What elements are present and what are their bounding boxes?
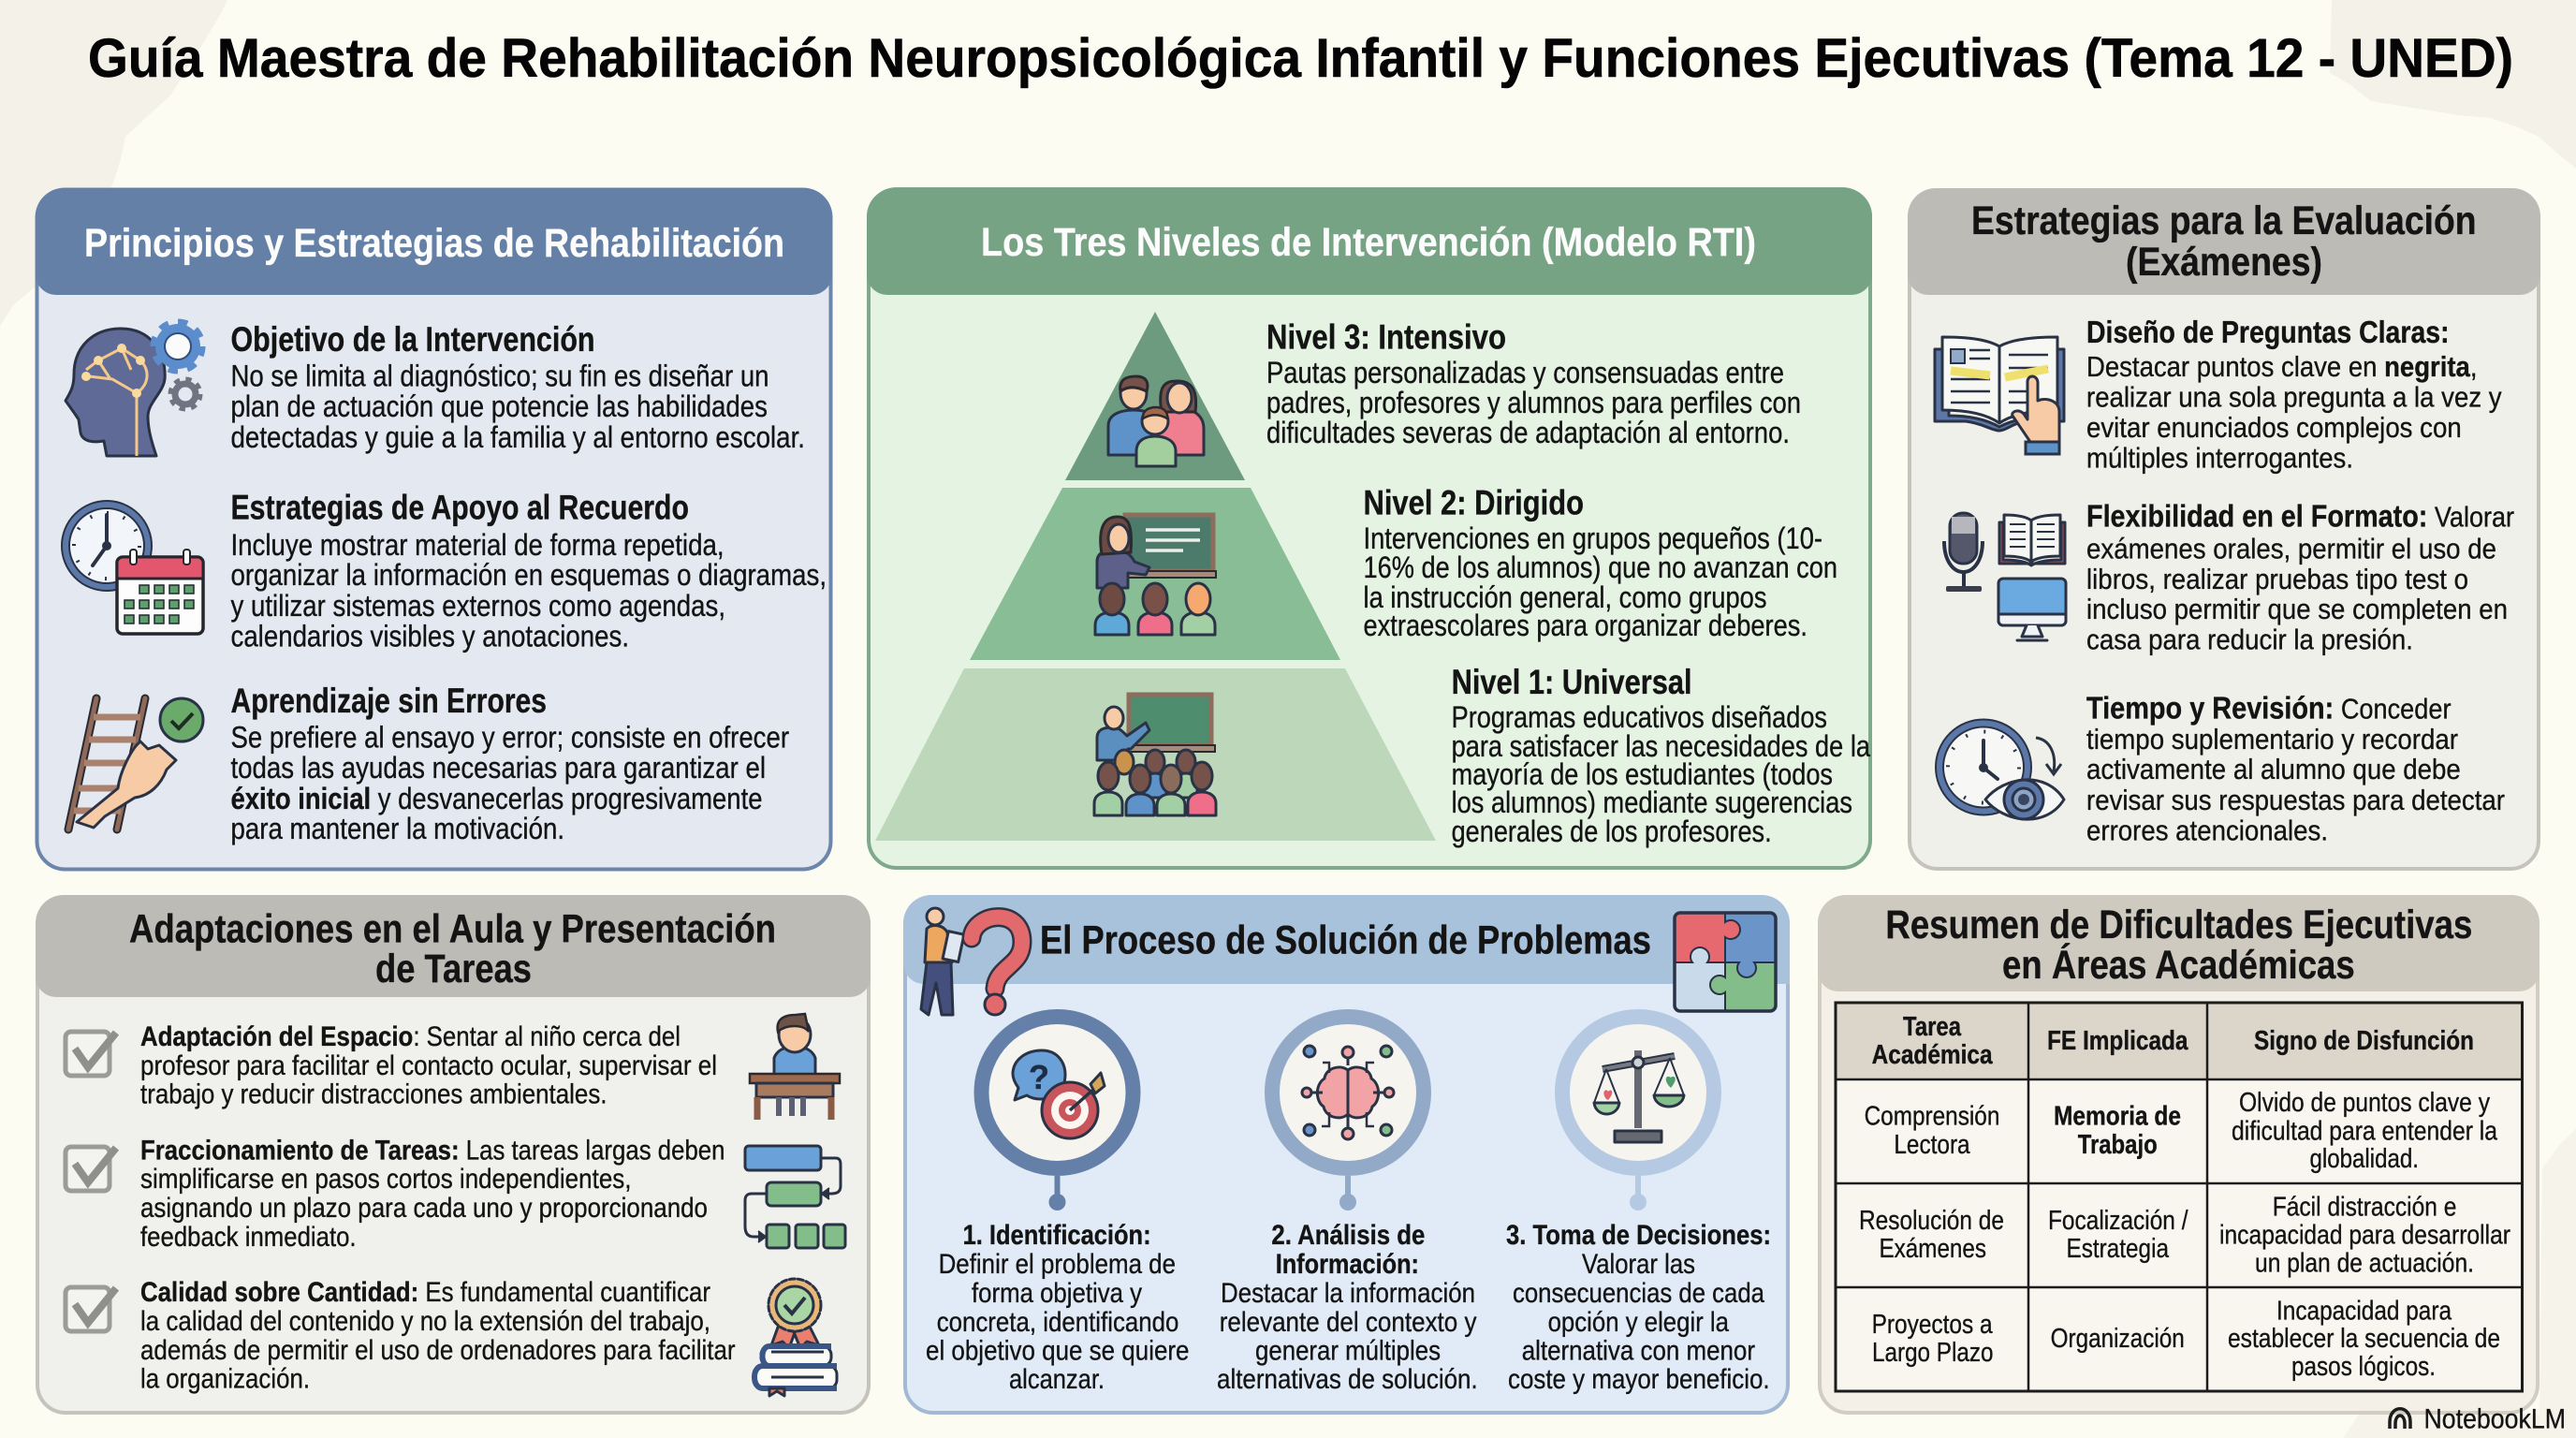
text: nivel 1 [1452,663,1870,848]
icon: head with gears [66,322,202,456]
table: dificultades ejecutivas: Signo de Disfunción [2254,1026,2474,1056]
panel: los tres niveles de intervención [867,188,1872,868]
text: nivel 1: Nivel 1: Universal [1452,663,1692,701]
text: flexibilidad en el formato: incluso permitir que se completen en [2086,593,2508,625]
table: dificultades ejecutivas: incapacidad para desarrollar [2219,1221,2510,1251]
text: objetivo de la intervención: plan de actuación que potencie las habilidades [230,389,768,423]
text: tiempo y revisión: tiempo suplementario y recordar [2086,723,2458,756]
text: tiempo y revisión: revisar sus respuestas para detectar [2086,784,2505,816]
text: análisis de información: generar múltiples [1255,1335,1441,1367]
text: adaptación del espacio: Adaptación del Espacio: Sentar al niño cerca del [140,1021,681,1052]
heading: adaptaciones: Adaptaciones en el Aula y Presentación [129,906,776,951]
checkbox 3 [66,1287,116,1331]
text: estrategias de apoyo al recuerdo: organizar la información en esquemas o diagramas, [230,558,827,592]
panel: principios y estrategias de rehabilitación [36,188,832,869]
table: dificultades ejecutivas: Olvido de puntos clave y [2239,1088,2490,1118]
heading: adaptaciones [36,895,871,997]
heading: principios [36,188,832,295]
heading: modelo RTI [867,188,1872,295]
text: nivel 1: los alumnos) mediante sugerencias [1452,785,1852,819]
text: nivel 1: para satisfacer las necesidades de la [1452,729,1870,763]
text: análisis de información: relevante del contexto y [1220,1307,1477,1338]
text: flexibilidad en el formato: casa para reducir la presión. [2086,624,2413,656]
text: aprendizaje sin errores [230,682,789,845]
text: estrategias de apoyo al recuerdo: Estrategias de Apoyo al Recuerdo [230,489,689,526]
heading: evaluación [1908,188,2540,295]
icon: task breakdown flow [745,1146,845,1248]
text: toma de decisiones: consecuencias de cada [1513,1278,1764,1309]
table: dificultades ejecutivas: Incapacidad para [2276,1297,2452,1327]
text: estrategias de apoyo al recuerdo: Incluye mostrar material de forma repetida, [230,528,724,562]
table: dificultades ejecutivas: pasos lógicos. [2291,1352,2436,1382]
icon: family [1108,376,1204,466]
panel: el proceso de solución de problemas [903,895,1790,1413]
text: tiempo y revisión: errores atencionales. [2086,814,2328,846]
text: flexibilidad en el formato: Flexibilidad en el Formato: Valorar [2086,498,2514,533]
table: dificultades ejecutivas: Organización [2051,1324,2185,1354]
text: calidad sobre cantidad: Calidad sobre Cantidad: Es fundamental cuantificar [140,1277,710,1308]
table: dificultades ejecutivas: Largo Plazo [1872,1338,1994,1368]
text: nivel 3: dificultades severas de adaptación al entorno. [1266,416,1790,449]
table: dificultades ejecutivas: Proyectos a [1872,1310,1993,1340]
text: calidad sobre cantidad: la calidad del contenido y no la extensión del trabajo, [140,1306,710,1337]
text: aprendizaje sin errores: para mantener la motivación. [230,812,564,845]
heading: resumen: en Áreas Académicas [2002,943,2355,988]
table: dificultades ejecutivas: Fácil distracción e [2273,1193,2456,1223]
step 3 marker and icon [1562,1017,1714,1211]
text: identificación [926,1220,1189,1395]
icon: clock and eye [1939,723,2064,819]
text: adaptación del espacio: profesor para facilitar el contacto ocular, supervisar el [140,1050,717,1081]
text: nivel 2: 16% de los alumnos) que no avanzan con [1363,550,1837,584]
text: nivel 3: Pautas personalizadas y consensuadas entre [1266,356,1784,389]
table: dificultades ejecutivas [1836,1003,2522,1391]
table: dificultades ejecutivas: globalidad. [2310,1144,2419,1174]
text: estrategias de apoyo al recuerdo: y utilizar sistemas externos como agendas, [230,589,725,623]
text: nivel 2: Nivel 2: Dirigido [1363,483,1584,521]
text: toma de decisiones [1506,1220,1771,1395]
icon: ladder, hand and check [68,698,203,829]
text: toma de decisiones: 3. Toma de Decisiones: [1506,1220,1771,1251]
table: dificultades ejecutivas: Exámenes [1880,1234,1986,1264]
checkbox 2 [66,1147,116,1191]
text: fraccionamiento de tareas [140,1135,724,1253]
text: fraccionamiento de tareas: feedback inmediato. [140,1222,357,1253]
text: nivel 2: extraescolares para organizar deberes. [1363,609,1808,642]
text: adaptación del espacio: trabajo y reducir distracciones ambientales. [140,1078,607,1109]
text: aprendizaje sin errores: todas las ayudas necesarias para garantizar el [230,751,766,785]
table: dificultades ejecutivas: Focalización / [2048,1206,2188,1236]
text: nivel 2: Intervenciones en grupos pequeños (10- [1363,521,1822,555]
text: calidad sobre cantidad: la organización. [140,1364,310,1395]
text: toma de decisiones: alternativa con menor [1522,1335,1755,1367]
text: nivel 3: padres, profesores y alumnos para perfiles con [1266,386,1801,419]
text: nivel 2: la instrucción general, como grupos [1363,580,1767,614]
table: dificultades ejecutivas: dificultad para entender la [2232,1117,2498,1147]
heading: solución de problemas: El Proceso de Solución de Problemas [1040,918,1651,963]
text: identificación: forma objetiva y [972,1278,1142,1309]
text: objetivo de la intervención: Objetivo de la Intervención [230,320,595,359]
text: identificación: 1. Identificación: [963,1220,1151,1251]
title: Guía Maestra de Rehabilitación Neuropsicológica Infantil y Funciones Ejecutivas (Tema 12 - UNED) [88,28,2513,89]
text: identificación: alcanzar. [1009,1364,1105,1395]
text: diseño de preguntas claras: múltiples interrogantes. [2086,441,2353,474]
heading: adaptaciones: de Tareas [375,946,532,991]
checkbox 1 [66,1032,116,1076]
text: nivel 1: mayoría de los estudiantes (todos [1452,757,1833,791]
text: toma de decisiones: Valorar las [1582,1249,1695,1280]
text: aprendizaje sin errores: Se prefiere al ensayo y error; consiste en ofrecer [230,721,789,755]
panel: resumen de dificultades ejecutivas [1818,895,2539,1413]
panel: estrategias para la evaluación [1908,188,2540,869]
text: análisis de información: alternativas de solución. [1217,1364,1478,1395]
table: dificultades ejecutivas: Tarea [1903,1012,1962,1042]
icon: microphone, book and monitor [1944,513,2066,640]
text: diseño de preguntas claras: realizar una sola pregunta a la vez y [2086,381,2502,414]
icon: open book with pointing hand [1935,337,2064,454]
text: análisis de información: 2. Análisis de [1271,1220,1425,1251]
icon: puzzle [1675,913,1776,1011]
text: análisis de información: Destacar la información [1221,1278,1475,1309]
text: análisis de información: Información: [1276,1249,1419,1280]
icon: student at desk [750,1014,840,1120]
table: dificultades ejecutivas: Estrategia [2067,1234,2170,1264]
text: flexibilidad en el formato: exámenes orales, permitir el uso de [2086,532,2496,565]
text: estrategias de apoyo al recuerdo [230,489,827,653]
heading: principios: Principios y Estrategias de Rehabilitación [84,221,784,266]
table: dificultades ejecutivas: Trabajo [2078,1130,2158,1160]
text: flexibilidad en el formato: libros, realizar pruebas tipo test o [2086,563,2468,595]
icon: person with question mark [921,908,1022,1015]
icon: clock and calendar [66,505,203,634]
heading: resumen: Resumen de Dificultades Ejecutivas [1885,902,2472,947]
text: fraccionamiento de tareas: asignando un plazo para cada uno y proporcionando [140,1193,708,1224]
panel: adaptaciones en el aula [36,895,871,1413]
table: dificultades ejecutivas: Memoria de [2054,1102,2181,1132]
text: fraccionamiento de tareas: simplificarse en pasos cortos independientes, [140,1164,631,1195]
text: identificación: concreta, identificando [937,1307,1178,1338]
text: adaptación del espacio [140,1021,717,1109]
text: diseño de preguntas claras: evitar enunciados complejos con [2086,411,2462,444]
table: dificultades ejecutivas: establecer la secuencia de [2228,1324,2500,1354]
icon: teacher with small group [1095,515,1216,635]
text: toma de decisiones: opción y elegir la [1548,1307,1729,1338]
heading: solución de problemas [903,895,1790,984]
pyramid level 1 [875,668,1436,841]
table: dificultades ejecutivas: FE Implicada [2047,1026,2188,1056]
text: identificación: el objetivo que se quiere [926,1335,1189,1367]
pyramid level 3 [1065,312,1245,480]
text: fraccionamiento de tareas: Fraccionamiento de Tareas: Las tareas largas deben [140,1135,724,1167]
text: nivel 2 [1363,483,1837,642]
text: diseño de preguntas claras: Diseño de Preguntas Claras: [2086,315,2450,349]
text: nivel 1: Programas educativos diseñados [1452,700,1827,734]
icon: medal over books [754,1279,837,1396]
heading: evaluación: Estrategias para la Evaluación [1971,198,2477,243]
heading: evaluación: (Exámenes) [2126,240,2322,285]
text: nivel 1: generales de los profesores. [1452,814,1772,848]
text: tiempo y revisión: activamente al alumno que debe [2086,753,2461,785]
table: dificultades ejecutivas: Lectora [1894,1130,1970,1160]
text: identificación: Definir el problema de [939,1249,1176,1280]
step 1 marker and icon [981,1017,1133,1211]
text: calidad sobre cantidad [140,1277,736,1395]
text: tiempo y revisión: Tiempo y Revisión: Conceder [2086,690,2452,725]
table: dificultades ejecutivas: un plan de actuación. [2255,1249,2474,1279]
table: dificultades ejecutivas: Resolución de [1859,1206,2004,1236]
text: objetivo de la intervención [230,320,805,454]
text: calidad sobre cantidad: además de permitir el uso de ordenadores para facilitar [140,1335,736,1366]
step 1 marker and icon: ? [1029,1058,1049,1096]
heading: modelo RTI: Los Tres Niveles de Intervención (Modelo RTI) [981,220,1756,265]
text: análisis de información [1217,1220,1478,1395]
text: tiempo y revisión [2086,690,2505,846]
pyramid level 2 [970,488,1340,660]
table: dificultades ejecutivas: Comprensión [1865,1102,1999,1132]
step 2 marker and icon [1272,1017,1424,1211]
text: objetivo de la intervención: No se limita al diagnóstico; su fin es diseñar un [230,360,769,393]
table: dificultades ejecutivas: Académica [1872,1040,1993,1070]
text: aprendizaje sin errores: Aprendizaje sin Errores [230,682,547,720]
text: objetivo de la intervención: detectadas y guie a la familia y al entorno escolar. [230,420,805,454]
text: diseño de preguntas claras [2086,315,2502,474]
text: aprendizaje sin errores: éxito inicial y desvanecerlas progresivamente [230,782,762,815]
text: toma de decisiones: coste y mayor beneficio. [1508,1364,1770,1395]
text: flexibilidad en el formato [2086,498,2514,656]
text: diseño de preguntas claras: Destacar puntos clave en negrita, [2086,350,2477,383]
heading: resumen [1818,895,2539,991]
text: nivel 3 [1266,318,1801,449]
text: nivel 3: Nivel 3: Intensivo [1266,318,1506,356]
text: estrategias de apoyo al recuerdo: calendarios visibles y anotaciones. [230,620,629,653]
icon: teacher with full class [1094,695,1216,815]
